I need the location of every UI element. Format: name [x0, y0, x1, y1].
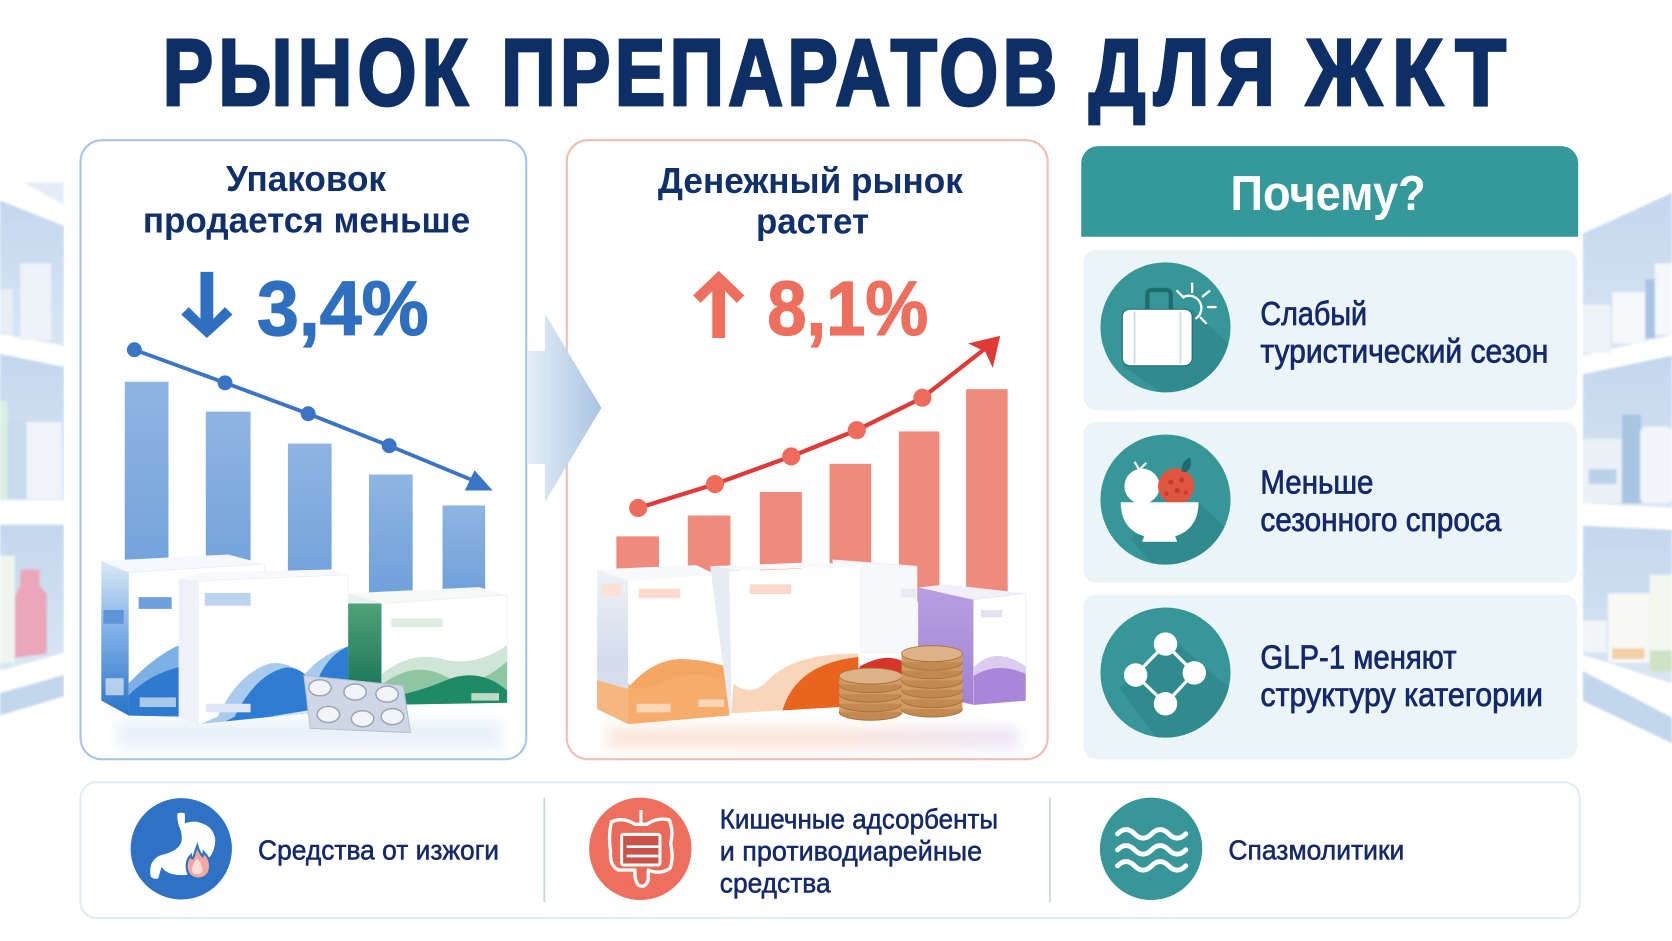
title: ПРЕПАРАТОВ [501, 20, 1057, 126]
text: less seasonal demand: Меньше [1260, 465, 1373, 502]
category: adsorbents: средства [720, 868, 831, 899]
heading: packages: продается меньше [143, 199, 470, 240]
box: blue front [179, 569, 349, 725]
text: less seasonal demand [1260, 465, 1502, 539]
text: weak tourist season: Слабый [1260, 296, 1367, 333]
heading: money market [658, 160, 964, 242]
reflection under boxes [608, 727, 1018, 749]
bar chart: falling volume [125, 382, 485, 606]
stat: minus 3.4 percent: 3,4% [257, 267, 429, 352]
background: pharmacy shelves right [1583, 193, 1672, 743]
text: less seasonal demand: сезонного спроса [1260, 502, 1502, 539]
icon: up arrow [693, 271, 744, 338]
category: spasmolytics: Спазмолитики [1228, 834, 1404, 865]
category: heartburn [131, 798, 499, 899]
icon: waves [1118, 830, 1186, 870]
row: weak tourist season [1083, 250, 1577, 411]
text: weak tourist season [1260, 296, 1548, 371]
text: weak tourist season: туристический сезон [1260, 334, 1548, 371]
row: less seasonal demand [1083, 422, 1577, 583]
row: GLP-1 [1083, 594, 1577, 759]
category: adsorbents: и противодиарейные [720, 836, 982, 867]
category: adsorbents [589, 798, 998, 900]
coins: tall stack [902, 646, 962, 717]
panel header [1081, 146, 1578, 237]
box: purple [918, 584, 1026, 706]
icon: molecule [1124, 632, 1206, 716]
text: GLP-1 [1260, 640, 1543, 714]
box: orange left [597, 565, 729, 725]
icon: fruit bowl [1121, 457, 1199, 542]
icon: down arrow [181, 272, 232, 338]
heading: money market: Денежный рынок [658, 160, 964, 201]
box: back white [833, 560, 917, 693]
heading: money market: растет [756, 201, 869, 242]
title: ЖКТ [1305, 19, 1506, 125]
background: pharmacy shelves left [0, 182, 64, 716]
arrow between panels [527, 313, 601, 502]
icon: stomach with flame [150, 813, 215, 879]
panel: packages sold fewer [81, 140, 526, 759]
bar chart: growing value [616, 389, 1008, 602]
text: GLP-1: GLP-1 меняют [1260, 640, 1457, 677]
title: РЫНОК [163, 20, 468, 126]
coins: short stack [839, 668, 902, 720]
panel: why [1081, 146, 1578, 760]
reflection under boxes [117, 721, 501, 749]
box: green [348, 587, 508, 706]
category: adsorbents: Кишечные адсорбенты [720, 804, 998, 835]
panel header: Почему? [1231, 167, 1426, 221]
icon: suitcase and sun [1122, 284, 1216, 366]
trend line: falling [127, 342, 493, 491]
panel: categories [81, 782, 1580, 918]
title: ДЛЯ [1089, 19, 1275, 126]
category: heartburn: Средства от изжоги [258, 834, 499, 865]
stat: plus 8.1 percent: 8,1% [767, 267, 928, 352]
title [163, 19, 1506, 126]
category: spasmolytics [1100, 798, 1404, 900]
box: blue back [101, 554, 264, 717]
heading: packages [143, 158, 470, 240]
blister pack [304, 676, 411, 733]
icon: intestine [610, 810, 672, 886]
trend line: rising [629, 336, 1000, 517]
box: orange centre [710, 562, 859, 714]
panel: money market grows [567, 140, 1048, 759]
text: GLP-1: структуру категории [1260, 677, 1543, 714]
heading: packages: Упаковок [226, 158, 387, 199]
